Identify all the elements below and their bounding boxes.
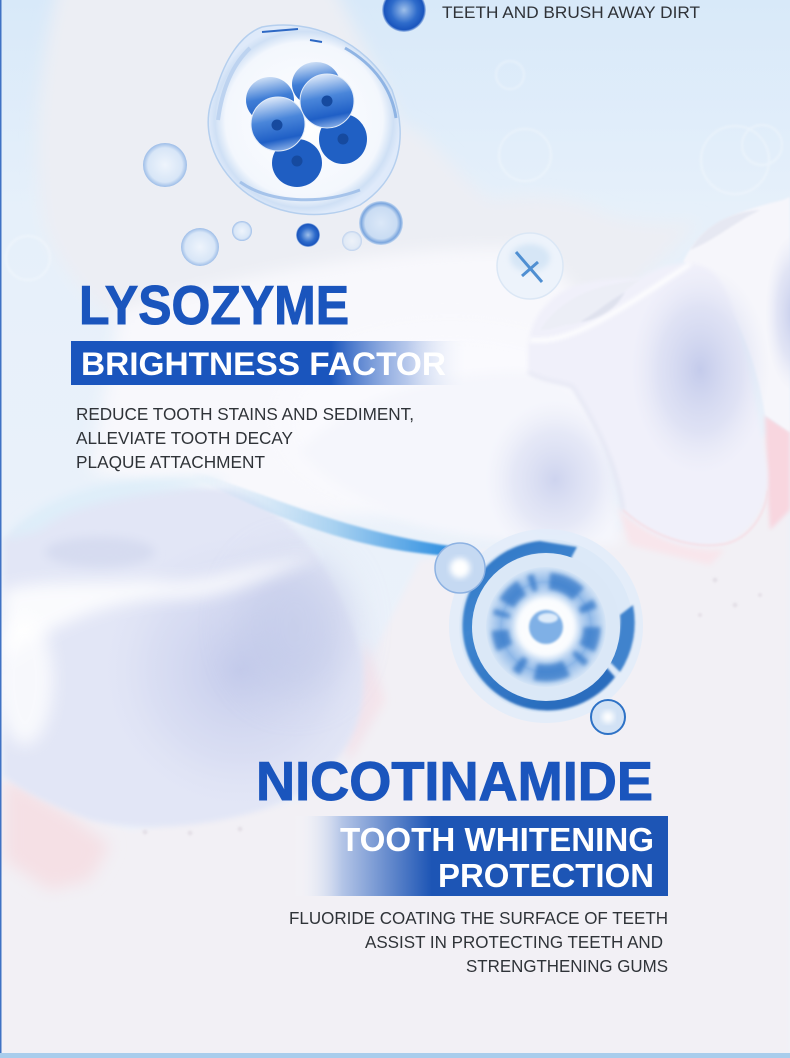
blue water streak bbox=[190, 470, 450, 556]
sphere droplets bbox=[435, 543, 625, 734]
heading: Lysozyme: LYSOZYME bbox=[79, 274, 349, 336]
body text: lysozyme: PLAQUE ATTACHMENT bbox=[76, 452, 265, 472]
nicotinamide sphere bbox=[435, 529, 643, 734]
body text: nicotinamide: STRENGTHENING GUMS bbox=[466, 956, 668, 976]
banner: tooth whitening protection: PROTECTION bbox=[438, 857, 654, 894]
tooth: right molar bbox=[528, 263, 770, 546]
body text: nicotinamide: ASSIST IN PROTECTING TEETH AND bbox=[365, 932, 663, 952]
foam speckles bbox=[142, 578, 762, 836]
faint background bubbles bbox=[6, 61, 782, 280]
tooth: far right molar bbox=[683, 197, 790, 432]
banner: brightness factor: BRIGHTNESS FACTOR bbox=[81, 346, 446, 382]
body text: lysozyme: ALLEVIATE TOOTH DECAY bbox=[76, 428, 293, 448]
body text: lysozyme bbox=[76, 404, 414, 472]
bubble with leaf-like mark bbox=[497, 233, 563, 299]
large cell bubble bbox=[208, 25, 400, 215]
iris flecks bbox=[500, 581, 592, 673]
bottom edge strip bbox=[0, 1053, 790, 1058]
body text: nicotinamide: FLUORIDE COATING THE SURFACE OF TEETH bbox=[289, 908, 668, 928]
banner: tooth whitening protection: TOOTH WHITENING bbox=[340, 821, 654, 858]
heading: Nicotinamide: NICOTINAMIDE bbox=[256, 750, 653, 812]
body text: nicotinamide bbox=[289, 908, 668, 976]
body text: lysozyme: REDUCE TOOTH STAINS AND SEDIMENT, bbox=[76, 404, 414, 424]
banner: tooth whitening protection bbox=[293, 816, 668, 896]
small droplets around cell bbox=[143, 0, 426, 266]
inner cells bbox=[246, 62, 367, 187]
top text fragment: TEETH AND BRUSH AWAY DIRT bbox=[442, 4, 700, 22]
tooth: middle molar bbox=[300, 372, 625, 560]
tooth: lower left molar bbox=[0, 478, 390, 827]
left edge line bbox=[0, 0, 2, 1053]
gums: pink accents bbox=[4, 415, 790, 890]
